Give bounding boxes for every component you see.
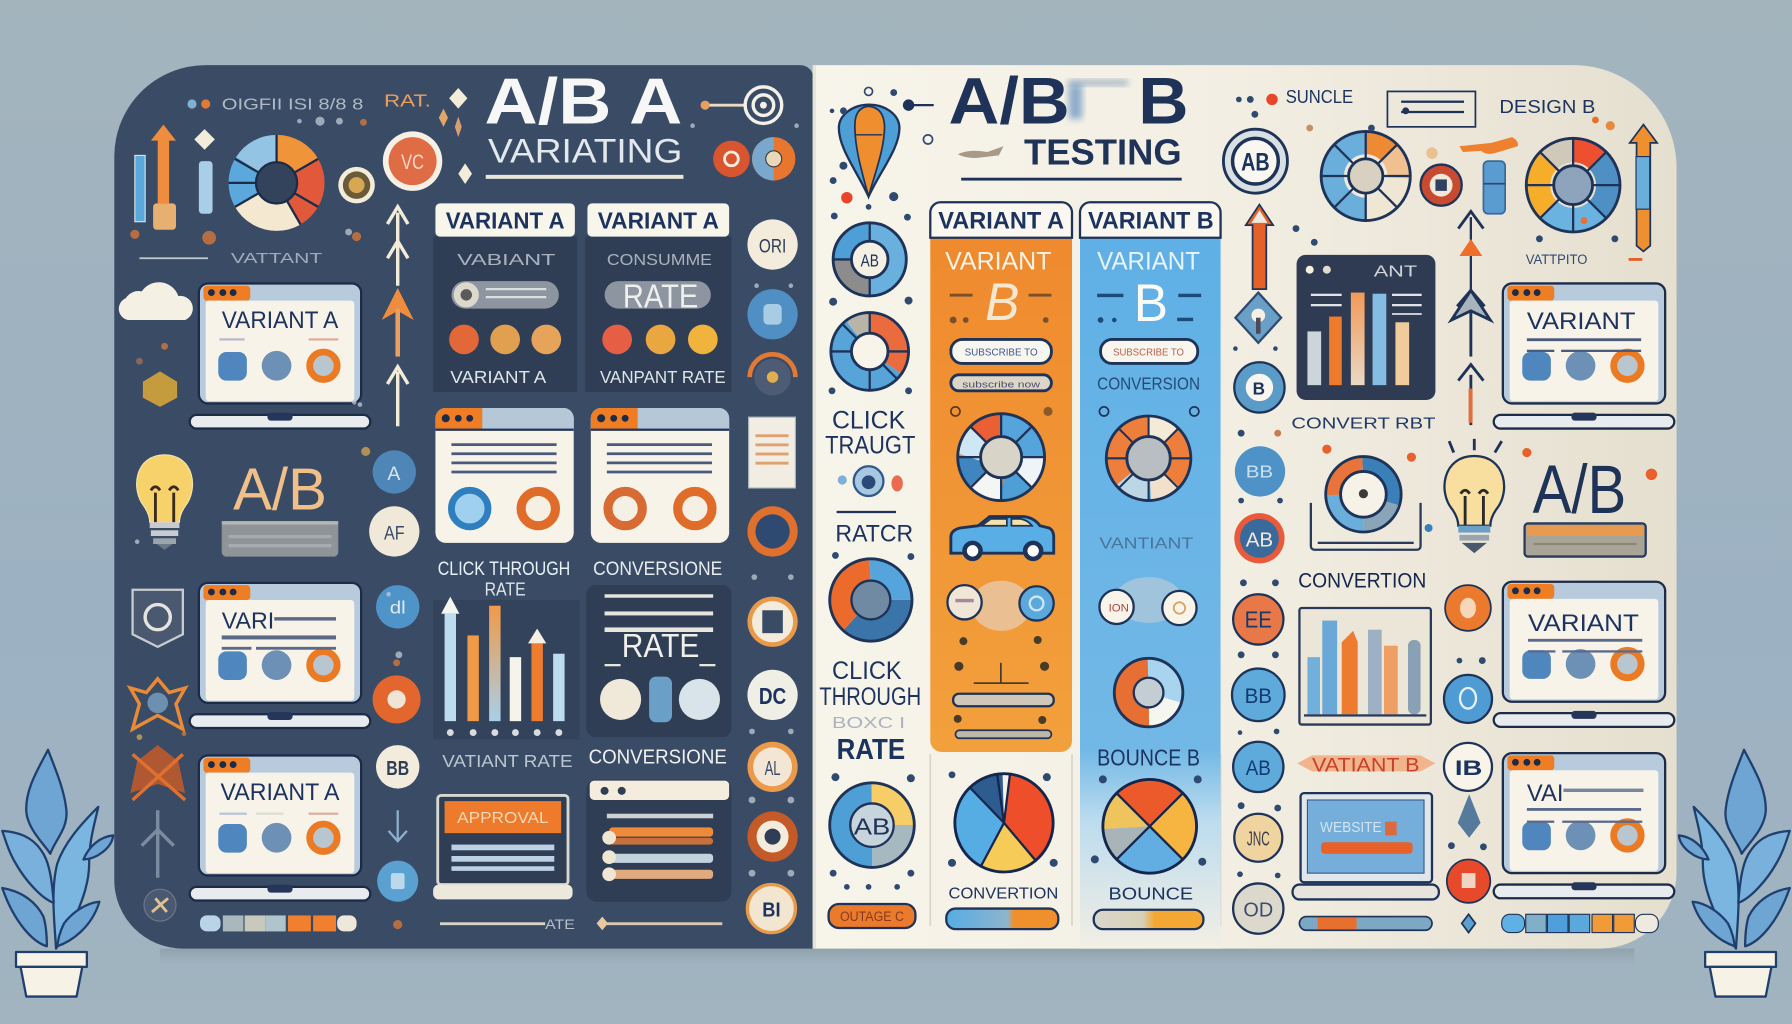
text: click through rate — [819, 657, 921, 766]
content card left — [435, 408, 574, 543]
column: variant A orange: SUBSCRIBE TO — [965, 347, 1038, 358]
laptop right 3: VAI — [1527, 780, 1563, 807]
icon pair blue column: ION — [1109, 602, 1129, 614]
conversione heading: CONVERSIONE — [593, 558, 722, 580]
badge AB — [1223, 129, 1287, 193]
text: click traugt: CLICK — [832, 407, 905, 435]
decorative smear — [958, 146, 1003, 158]
tall arrow — [1629, 125, 1657, 259]
slider rate — [440, 917, 575, 932]
bounce b heading: BOUNCE B — [1097, 745, 1200, 771]
badge small gold — [338, 167, 375, 203]
top label text — [187, 97, 364, 114]
wheel: left 2 — [831, 313, 909, 390]
icon: cloud — [119, 282, 193, 320]
icon: balloon pin — [839, 105, 899, 197]
middle column badges: AF — [384, 522, 405, 544]
caption conversione: CONVERSIONE — [589, 745, 727, 768]
laptop blue screen: WEBSITE — [1320, 820, 1382, 836]
connector pin — [903, 99, 934, 111]
title: A/B A — [485, 64, 682, 137]
column: variant B blue: VANTIANT — [1099, 536, 1193, 553]
title — [949, 64, 1189, 181]
wheel top right 1 — [1321, 131, 1410, 221]
wheel: left 3 — [830, 559, 912, 641]
column: variant A orange — [930, 202, 1072, 752]
column: variant A orange: subscribe now — [962, 379, 1041, 389]
middle right badges: IB — [1455, 755, 1482, 780]
caption convert: CONVERT RBT — [1291, 416, 1436, 433]
progress pill bounce — [1094, 910, 1203, 929]
column: variant B blue: SUBSCRIBE TO — [1113, 347, 1184, 358]
middle column badges — [369, 450, 421, 902]
wheel: orange column — [958, 414, 1045, 501]
laptop 3 — [190, 755, 370, 901]
column: variant B blue: CONVERSION — [1097, 374, 1200, 394]
badges lower left column: EE — [1245, 606, 1272, 632]
text: click traugt — [825, 407, 915, 460]
icon: camera — [837, 466, 903, 513]
laptop right 2 — [1494, 582, 1674, 727]
progress strip right — [1502, 914, 1658, 933]
icon: light bulb — [137, 455, 193, 550]
wheel chart — [229, 135, 318, 224]
badge AB: AB — [1241, 148, 1270, 176]
label bounce: BOUNCE — [1109, 883, 1193, 903]
middle column badges: A — [387, 463, 400, 485]
right column icons: DC — [759, 683, 786, 709]
laptop with orange banner: APPROVAL — [457, 810, 549, 827]
bar right — [1525, 523, 1646, 557]
column: rate controls: CONSUMME — [607, 252, 712, 269]
small red badge — [1421, 165, 1462, 206]
column: variant A controls: VARIANT A — [450, 367, 547, 387]
header tabs variant A: VARIANT A — [446, 208, 565, 234]
dark bar chart card — [1297, 255, 1435, 400]
text: click through rate: THROUGH — [819, 683, 921, 711]
pair of round icons — [713, 137, 795, 181]
header tabs variant A: VARIANT A — [598, 208, 719, 234]
panel: dark variant side — [114, 64, 814, 949]
pie chart bounce — [1083, 760, 1216, 893]
badge B: B — [1253, 378, 1265, 398]
A/B heading right: A/B — [1533, 451, 1626, 528]
column: variant B blue: B — [1134, 274, 1168, 333]
icon: left plant — [2, 750, 113, 997]
right column icons: BI — [762, 899, 781, 922]
icon: orange up arrow with bars — [135, 125, 213, 230]
wheel top right 2 — [1526, 138, 1620, 232]
small diamond — [1462, 914, 1475, 933]
header tabs variant A — [433, 203, 731, 392]
laptop right 2: VARIANT — [1528, 610, 1639, 637]
title: TESTING — [1024, 132, 1182, 173]
title — [485, 64, 683, 179]
caption variant rate: VATIANT RATE — [442, 751, 573, 771]
text: ratcr: RATCR — [835, 521, 913, 548]
pot left — [16, 952, 87, 997]
content card right — [591, 408, 729, 543]
bar chart: click through — [433, 597, 579, 739]
laptop 1 — [190, 283, 370, 429]
laptop blue screen — [1293, 793, 1439, 899]
right column icons — [747, 219, 798, 933]
pill orange — [829, 904, 915, 928]
title: B — [1138, 64, 1189, 138]
badge big orange — [383, 131, 442, 191]
wheel: left 1 — [833, 223, 906, 296]
column: variant B blue — [1080, 202, 1221, 949]
top labels right: DESIGN B — [1499, 96, 1595, 117]
icon: light bulb right — [1444, 439, 1504, 553]
rate card: RATE — [622, 628, 699, 665]
column: rate controls — [600, 252, 726, 387]
badges lower left column: OD — [1243, 899, 1273, 922]
icon: target with connector — [701, 87, 782, 123]
bar chart card outline — [1299, 608, 1431, 725]
badges lower left column: AB — [1246, 528, 1273, 551]
rate label: RAT. — [384, 90, 431, 110]
column guide lines — [930, 754, 1221, 926]
laptop 2 — [190, 583, 370, 728]
wheel: blue column — [1106, 416, 1191, 501]
column: variant A controls — [449, 252, 561, 387]
list card — [586, 779, 731, 902]
caption faded: VATTANT — [231, 251, 322, 267]
laptop 1: VARIANT A — [222, 307, 338, 334]
small wheel blue column — [1114, 658, 1183, 727]
heading conversion right: CONVERTION — [1298, 567, 1426, 592]
click through heading: RATE — [485, 578, 526, 599]
progress strip middle — [1299, 917, 1432, 930]
top labels right: SUNCLE — [1286, 86, 1353, 107]
slider right — [597, 917, 722, 930]
middle column badges: BB — [386, 757, 409, 780]
badge B — [1234, 362, 1285, 413]
top label text: OIGFII ISI 8/8 8 — [222, 97, 364, 114]
panel: light variant side — [813, 64, 1677, 949]
scattered dots dark — [130, 117, 799, 929]
caption variant B ribbon: VATIANT B — [1312, 754, 1419, 776]
laptop right 3 — [1494, 753, 1674, 898]
column: rate controls: RATE — [623, 278, 698, 315]
right column icons: ORI — [759, 236, 786, 258]
wheel: left 4 — [830, 783, 914, 867]
title: A/B — [949, 64, 1070, 138]
text: click through rate: BOXC I — [832, 715, 905, 732]
side icons: shield and stars — [130, 590, 185, 921]
icon pair orange column — [947, 581, 1054, 631]
grey bar — [222, 521, 338, 557]
laptop right 1 — [1494, 283, 1674, 429]
right column icons: AL — [765, 757, 781, 780]
controls orange column — [954, 636, 1049, 724]
column: variant A orange: VARIANT — [945, 248, 1051, 276]
text: click through rate: CLICK — [832, 657, 902, 685]
badges lower left column: BB — [1245, 683, 1272, 708]
column: variant A controls: VABIANT — [457, 252, 556, 269]
text: click through rate: RATE — [837, 734, 905, 766]
rate card — [586, 585, 731, 737]
pill orange: OUTAGE C — [840, 909, 904, 924]
icon: car — [951, 517, 1054, 559]
progress pill conversion — [946, 909, 1058, 929]
label conversion: CONVERTION — [949, 885, 1058, 902]
column: variant B blue: VARIANT B — [1088, 208, 1214, 235]
A/B heading: A/B — [233, 456, 327, 523]
brush icon — [1426, 137, 1518, 159]
arrows right of chart — [1451, 211, 1490, 425]
badge big orange: VC — [401, 149, 424, 174]
badges lower left column: AB — [1246, 755, 1271, 780]
badges lower left column: JNC — [1247, 828, 1270, 851]
scattered dots light — [829, 87, 1657, 890]
click through heading — [438, 558, 570, 599]
decorative diamonds — [194, 88, 472, 184]
badges lower left column — [1232, 446, 1285, 934]
laptop 3: VARIANT A — [221, 779, 339, 806]
arrows column — [382, 207, 414, 426]
blue block — [1483, 161, 1505, 214]
click through heading: CLICK THROUGH — [438, 558, 570, 580]
middle right badges — [1444, 585, 1492, 903]
progress strip — [200, 915, 357, 931]
caption variant faded: VATTPITO — [1526, 252, 1587, 267]
middle column badges: dl — [390, 598, 406, 618]
gold hexagon — [143, 371, 177, 407]
top labels right — [1247, 86, 1595, 127]
column: variant A orange: B — [985, 273, 1019, 332]
column: rate controls: VANPANT RATE — [600, 367, 726, 387]
slider rate: ATE — [545, 917, 575, 932]
icon pair blue column — [1099, 577, 1197, 625]
column: variant A orange: VARIANT A — [938, 208, 1064, 235]
pot — [1705, 952, 1776, 997]
pie chart conversion — [955, 774, 1053, 872]
arrows left of chart — [1235, 205, 1281, 343]
dark bar chart card: ANT — [1374, 264, 1417, 281]
title: VARIATING — [488, 132, 682, 170]
text: click traugt: TRAUGT — [825, 432, 915, 460]
laptop 2: VARI — [222, 608, 274, 634]
panel: light variant side: AB — [854, 813, 890, 839]
panel: light variant side: AB — [861, 250, 879, 270]
badges lower left column: BB — [1246, 462, 1273, 482]
column: variant B blue: VARIANT — [1097, 248, 1200, 276]
icon: right plant — [1679, 750, 1790, 997]
laptop right 1: VARIANT — [1527, 308, 1636, 335]
donut on monitor — [1311, 457, 1421, 550]
laptop with orange banner — [433, 795, 573, 899]
